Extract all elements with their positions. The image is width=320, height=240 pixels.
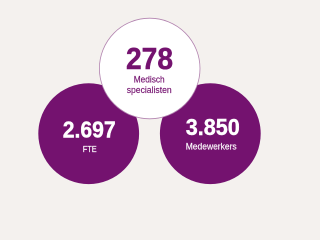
panel: Medisch specialisten circle (99, 18, 200, 119)
label: FTE: FTE (83, 144, 97, 154)
label: Medisch: Medisch (134, 75, 165, 86)
label: specialisten: specialisten (127, 85, 172, 96)
number: 278: 278 (126, 41, 173, 76)
number: 2.697: 2.697 (63, 116, 116, 142)
label: Medewerkers: Medewerkers (186, 142, 237, 153)
number: 3.850: 3.850 (186, 114, 240, 140)
panel: Medewerkers circle (160, 83, 261, 184)
panel: FTE circle (38, 83, 139, 184)
